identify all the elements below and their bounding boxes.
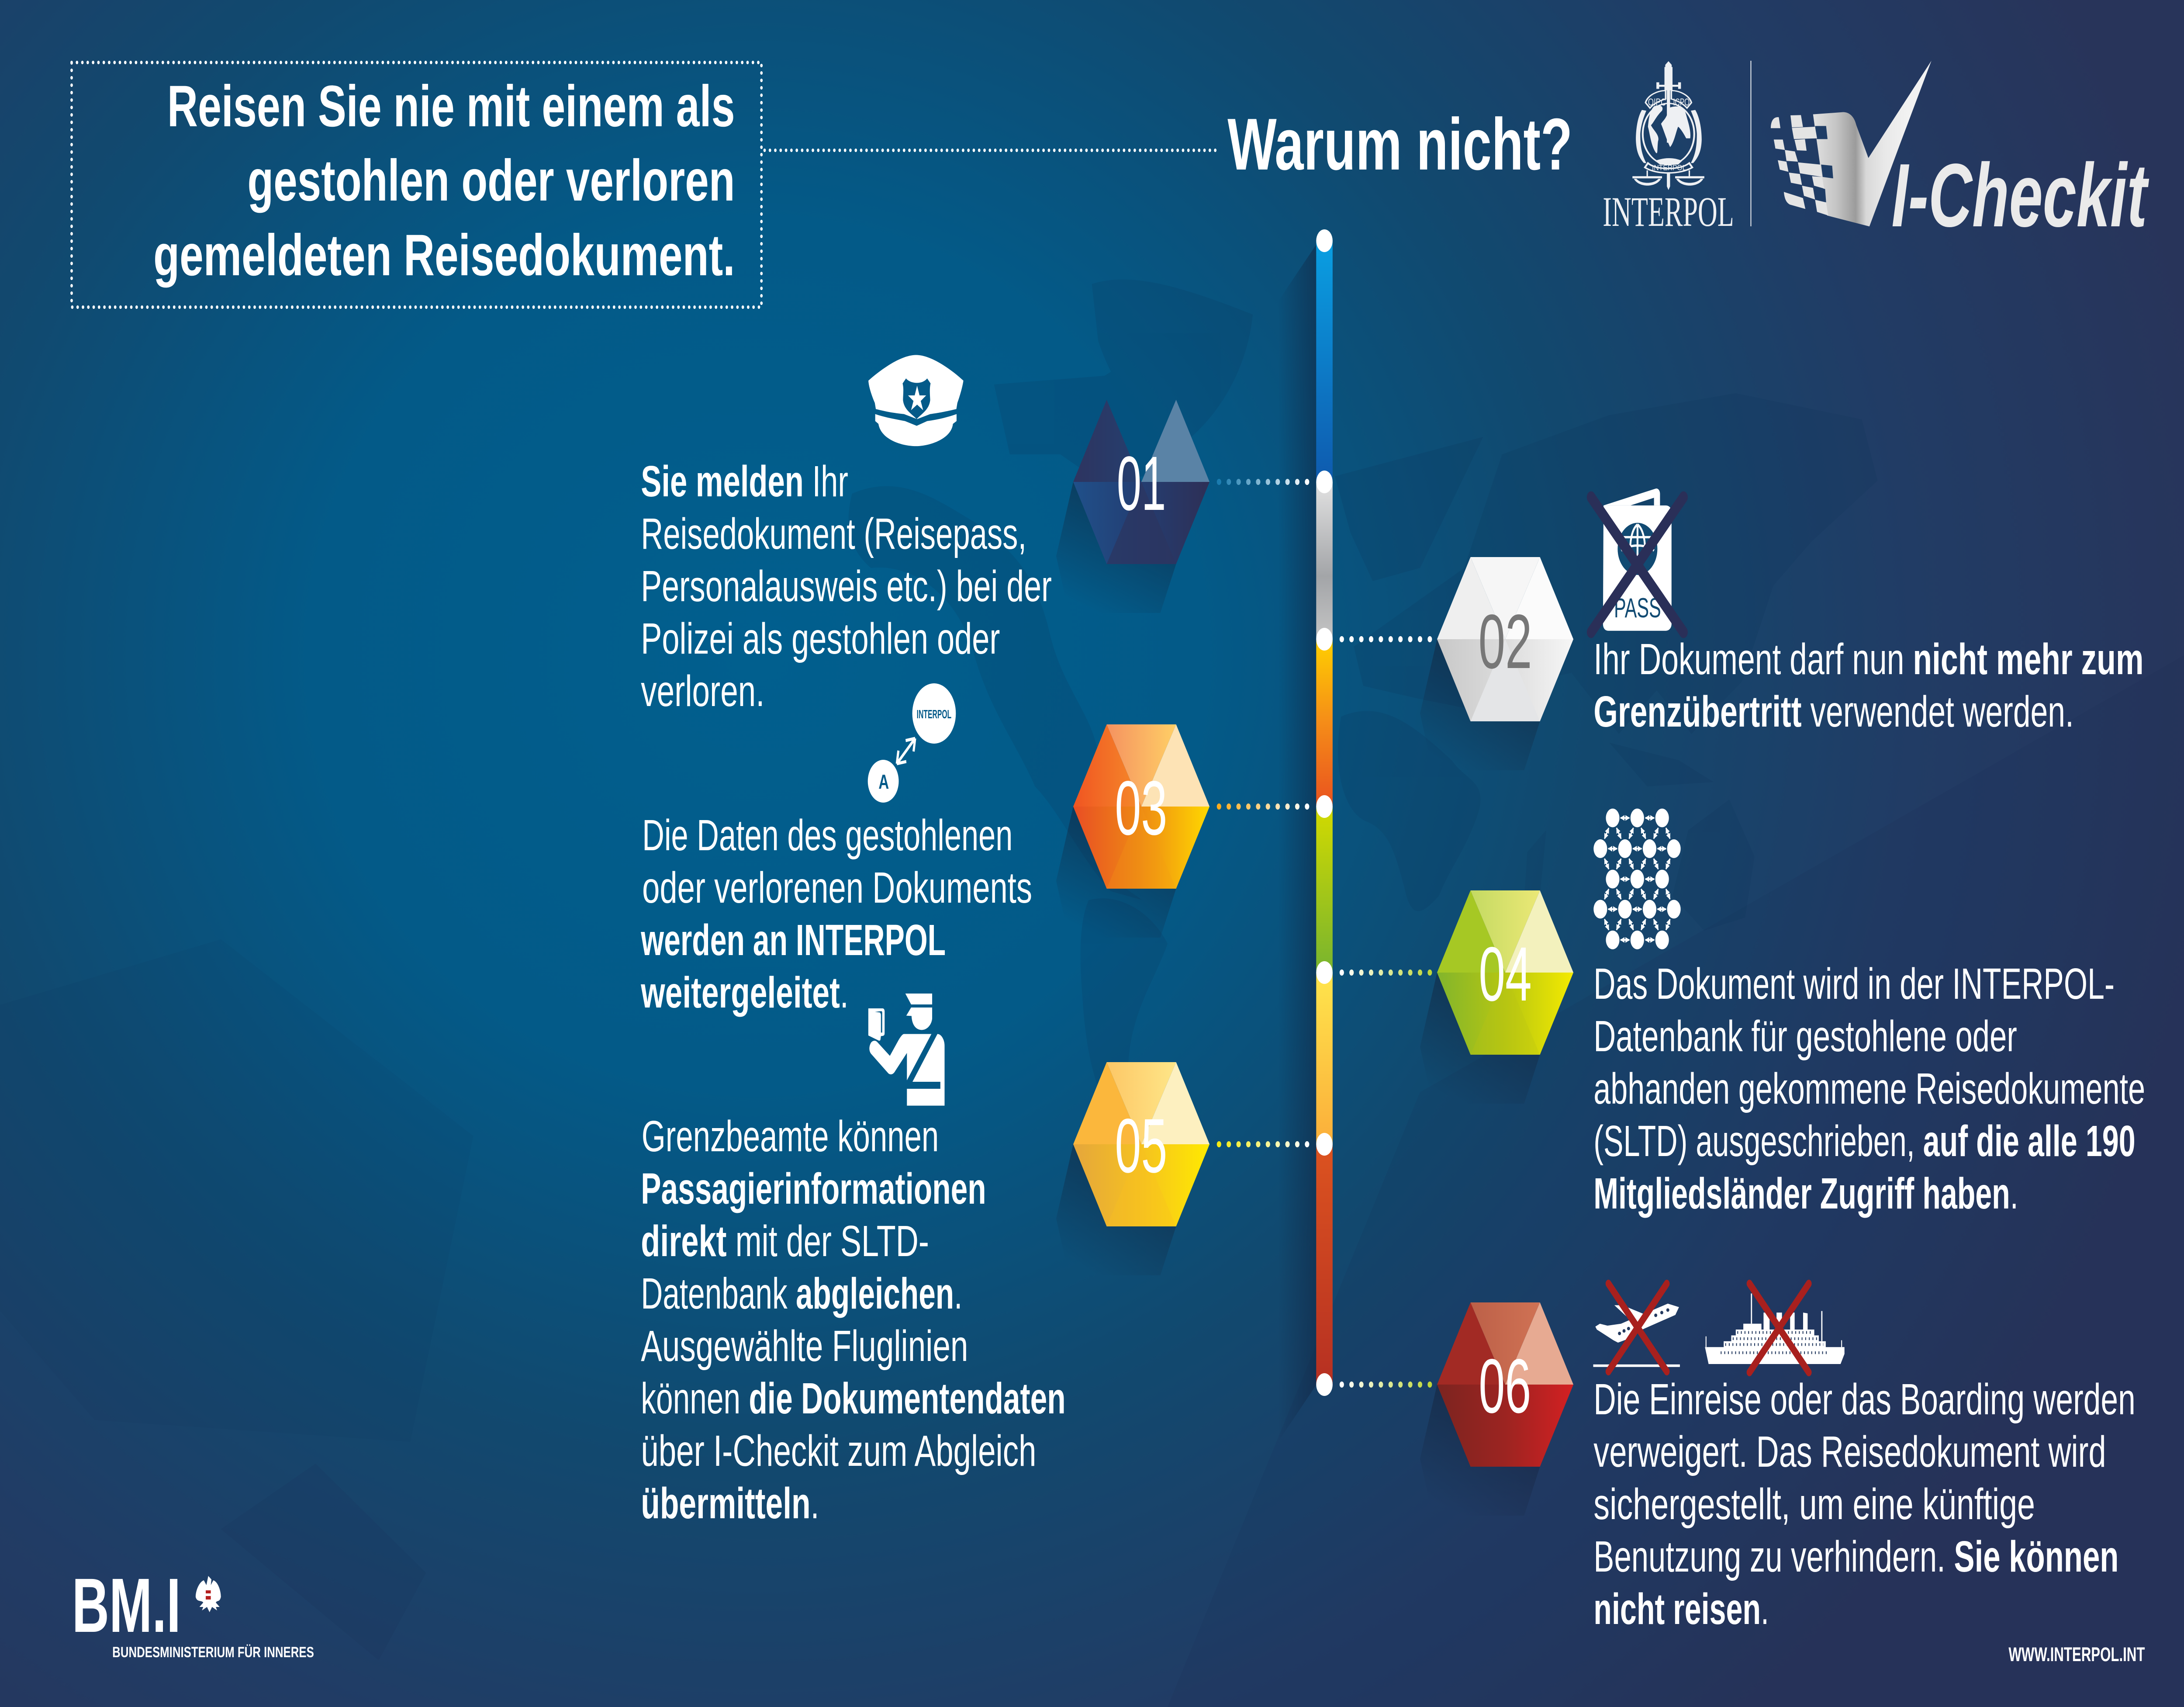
- text block: step 6: verweigert. Das Reisedokument wird: [1593, 1428, 2106, 1476]
- text block: step 2: Grenzübertritt verwendet werden.: [1593, 688, 2074, 736]
- icon: database network: [1593, 809, 1681, 949]
- icon: border officer: [868, 994, 944, 1106]
- icon: INTERPOL data exchange: A: [878, 771, 889, 793]
- text block: step 4: Datenbank für gestohlene oder: [1593, 1012, 2017, 1061]
- hexagon 03: 03: [1115, 765, 1167, 851]
- logo: I-Checkit: [1771, 61, 2149, 246]
- text block: step 5: [641, 1112, 1066, 1528]
- text block: step 5: übermitteln.: [641, 1479, 819, 1528]
- panel: headline box: [72, 62, 1216, 307]
- text block: step 3: werden an INTERPOL: [640, 916, 946, 965]
- text block: step 1: Reisedokument (Reisepass,: [641, 510, 1026, 558]
- divider: [1750, 61, 1752, 226]
- icon: eagle: [196, 1576, 221, 1612]
- text block: step 1: Personalausweis etc.) bei der: [641, 562, 1052, 611]
- text block: step 3: oder verlorenen Dokuments: [642, 864, 1032, 912]
- text block: step 2: Ihr Dokument darf nun nicht mehr zum: [1593, 635, 2144, 684]
- icon: INTERPOL emblem: ICPO: [1673, 97, 1690, 108]
- headline line 1: Reisen Sie nie mit einem als: [167, 73, 735, 139]
- icon: passport crossed out: PASS: [1614, 592, 1661, 623]
- text block: step 3: [640, 811, 1032, 1017]
- hexagon 04: 04: [1479, 931, 1532, 1017]
- icon: INTERPOL emblem: OIPC: [1648, 97, 1666, 108]
- icon: passport crossed out: [1591, 488, 1683, 632]
- headline line 3: gemeldeten Reisedokument.: [153, 222, 735, 288]
- text block: step 4: (SLTD) ausgeschrieben, auf die alle 190: [1593, 1117, 2136, 1166]
- dotted connectors: [1219, 482, 1433, 1385]
- text block: step 5: Grenzbeamte können: [642, 1112, 939, 1161]
- text block: step 5: Ausgewählte Fluglinien: [641, 1322, 968, 1371]
- text block: step 4: Das Dokument wird in der INTERPOL-: [1593, 960, 2115, 1008]
- text block: step 5: können die Dokumentendaten: [641, 1375, 1066, 1423]
- text block: step 6: Benutzung zu verhindern. Sie können: [1593, 1533, 2118, 1581]
- icon: INTERPOL data exchange: INTERPOL: [917, 708, 951, 721]
- icon: check mark with checker flag: [1771, 61, 1932, 226]
- text block: step 3: weitergeleitet.: [640, 969, 849, 1017]
- text block: step 1: Sie melden Ihr: [641, 457, 848, 506]
- hexagon 06: 06: [1479, 1343, 1531, 1429]
- hexagon 02: [1420, 557, 1573, 770]
- website URL: WWW.INTERPOL.INT: [2008, 1644, 2145, 1665]
- icon: INTERPOL emblem: INTERPOL: [1652, 163, 1686, 172]
- world map: [849, 280, 1878, 1110]
- text block: step 6: nicht reisen.: [1593, 1585, 1769, 1634]
- logo: INTERPOL: [1603, 61, 1734, 235]
- hexagon 04: [1420, 890, 1573, 1104]
- hexagon 06: [1420, 1302, 1573, 1516]
- text block: step 6: Die Einreise oder das Boarding werden: [1593, 1375, 2136, 1424]
- icon: INTERPOL data exchange: [868, 683, 956, 803]
- hexagon 01: 01: [1117, 440, 1166, 526]
- text block: step 6: [1593, 1375, 2136, 1634]
- text block: step 5: über I-Checkit zum Abgleich: [641, 1427, 1036, 1475]
- text block: step 5: Passagierinformationen: [641, 1165, 986, 1213]
- INTERPOL wordmark: INTERPOL: [1603, 189, 1734, 235]
- icon: INTERPOL emblem: [1632, 61, 1704, 190]
- hexagon 03: [1056, 724, 1209, 938]
- text block: step 5: Datenbank abgleichen.: [641, 1270, 962, 1318]
- heading: Warum nicht: Warum nicht?: [1227, 104, 1572, 186]
- text block: step 3: Die Daten des gestohlenen: [642, 811, 1013, 860]
- text block: step 5: direkt mit der SLTD-: [641, 1217, 929, 1266]
- timeline bar: [1278, 229, 1333, 1442]
- BM.I wordmark: BM.I: [72, 1562, 181, 1648]
- text block: step 4: [1593, 960, 2145, 1218]
- text block: step 1: [641, 457, 1052, 716]
- hexagon 02: 02: [1479, 599, 1532, 685]
- I-Checkit wordmark: I-Checkit: [1891, 145, 2149, 246]
- logo: BM.I: [72, 1562, 314, 1661]
- text block: step 1: Polizei als gestohlen oder: [641, 615, 1000, 663]
- text block: step 6: sichergestellt, um eine künftige: [1593, 1480, 2035, 1529]
- hexagon 05: 05: [1115, 1103, 1167, 1189]
- dotted link to question: [764, 149, 1216, 152]
- text block: step 2: [1593, 635, 2144, 736]
- icon: plane crossed out: [1593, 1284, 1680, 1371]
- dotted box frame: [72, 62, 761, 307]
- icon: police cap: [868, 355, 964, 446]
- text block: step 4: Mitgliedsländer Zugriff haben.: [1593, 1170, 2018, 1218]
- headline line 2: gestohlen oder verloren: [247, 147, 735, 213]
- ministry name: BUNDESMINISTERIUM FÜR INNERES: [112, 1644, 314, 1661]
- text block: step 1: verloren.: [641, 667, 764, 716]
- hexagon 05: [1056, 1062, 1209, 1275]
- icon: ship crossed out: [1705, 1284, 1845, 1372]
- text block: step 4: abhanden gekommene Reisedokumente: [1593, 1065, 2145, 1113]
- hexagon 01: [1056, 400, 1209, 613]
